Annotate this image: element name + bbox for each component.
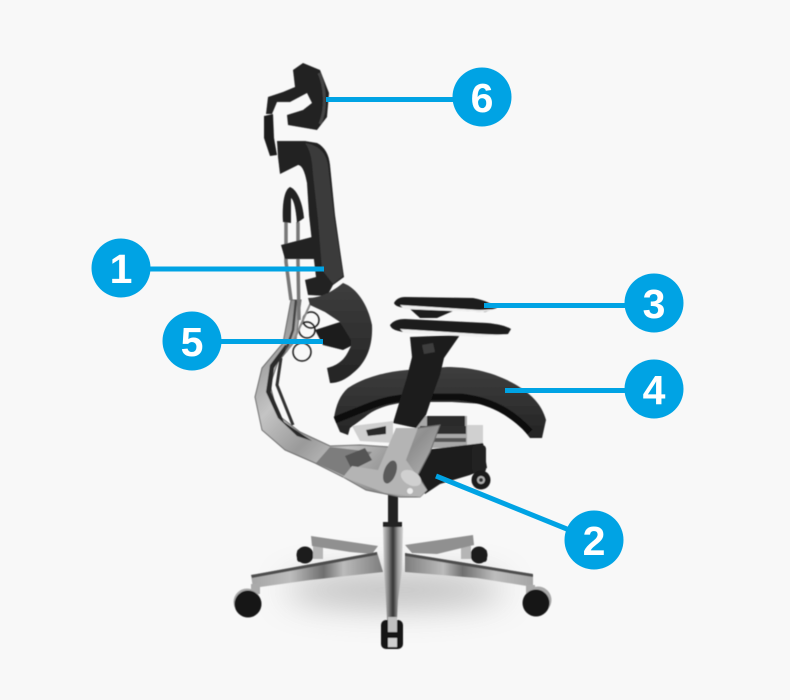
under-seat plate <box>352 421 393 443</box>
callout 1 <box>92 238 324 298</box>
chair base <box>234 490 552 649</box>
floor shadow <box>285 574 505 606</box>
callout 6: 6 <box>471 75 493 121</box>
callout 3 <box>484 274 684 332</box>
right leg <box>405 553 533 587</box>
callout 2: 2 <box>583 518 605 564</box>
rear casters <box>296 546 488 564</box>
chair illustration <box>234 63 552 649</box>
chrome frame <box>255 300 440 497</box>
neck post <box>264 114 277 156</box>
frame fork <box>343 428 427 497</box>
callout 4: 4 <box>643 367 666 413</box>
rear uprights and rings <box>281 187 319 361</box>
headrest <box>264 63 329 156</box>
seat cushion <box>334 367 546 438</box>
under-seat controls <box>415 416 467 448</box>
upper back <box>277 141 344 296</box>
gas lift <box>388 490 398 525</box>
callout 2 <box>436 476 624 570</box>
tilt knob <box>472 470 490 490</box>
left caster <box>234 584 262 618</box>
left leg <box>251 552 383 588</box>
callout 6 <box>326 68 512 126</box>
callout 5: 5 <box>181 319 203 365</box>
callout 5 <box>162 312 323 370</box>
front caster <box>381 617 403 649</box>
upper armrest <box>394 297 497 318</box>
callout 4 <box>505 360 684 418</box>
callout 1: 1 <box>110 246 132 292</box>
rear legs <box>311 536 378 554</box>
hub and front leg <box>383 527 403 620</box>
right caster <box>522 585 552 616</box>
frame mid plate <box>316 447 372 477</box>
callout 3: 3 <box>643 281 665 327</box>
tilt housing <box>408 443 487 494</box>
frame inner tubes <box>266 345 312 441</box>
lumbar back pad <box>308 283 372 383</box>
lower armrest <box>390 319 511 337</box>
seat mechanism <box>352 416 490 494</box>
armrest post <box>393 335 460 428</box>
